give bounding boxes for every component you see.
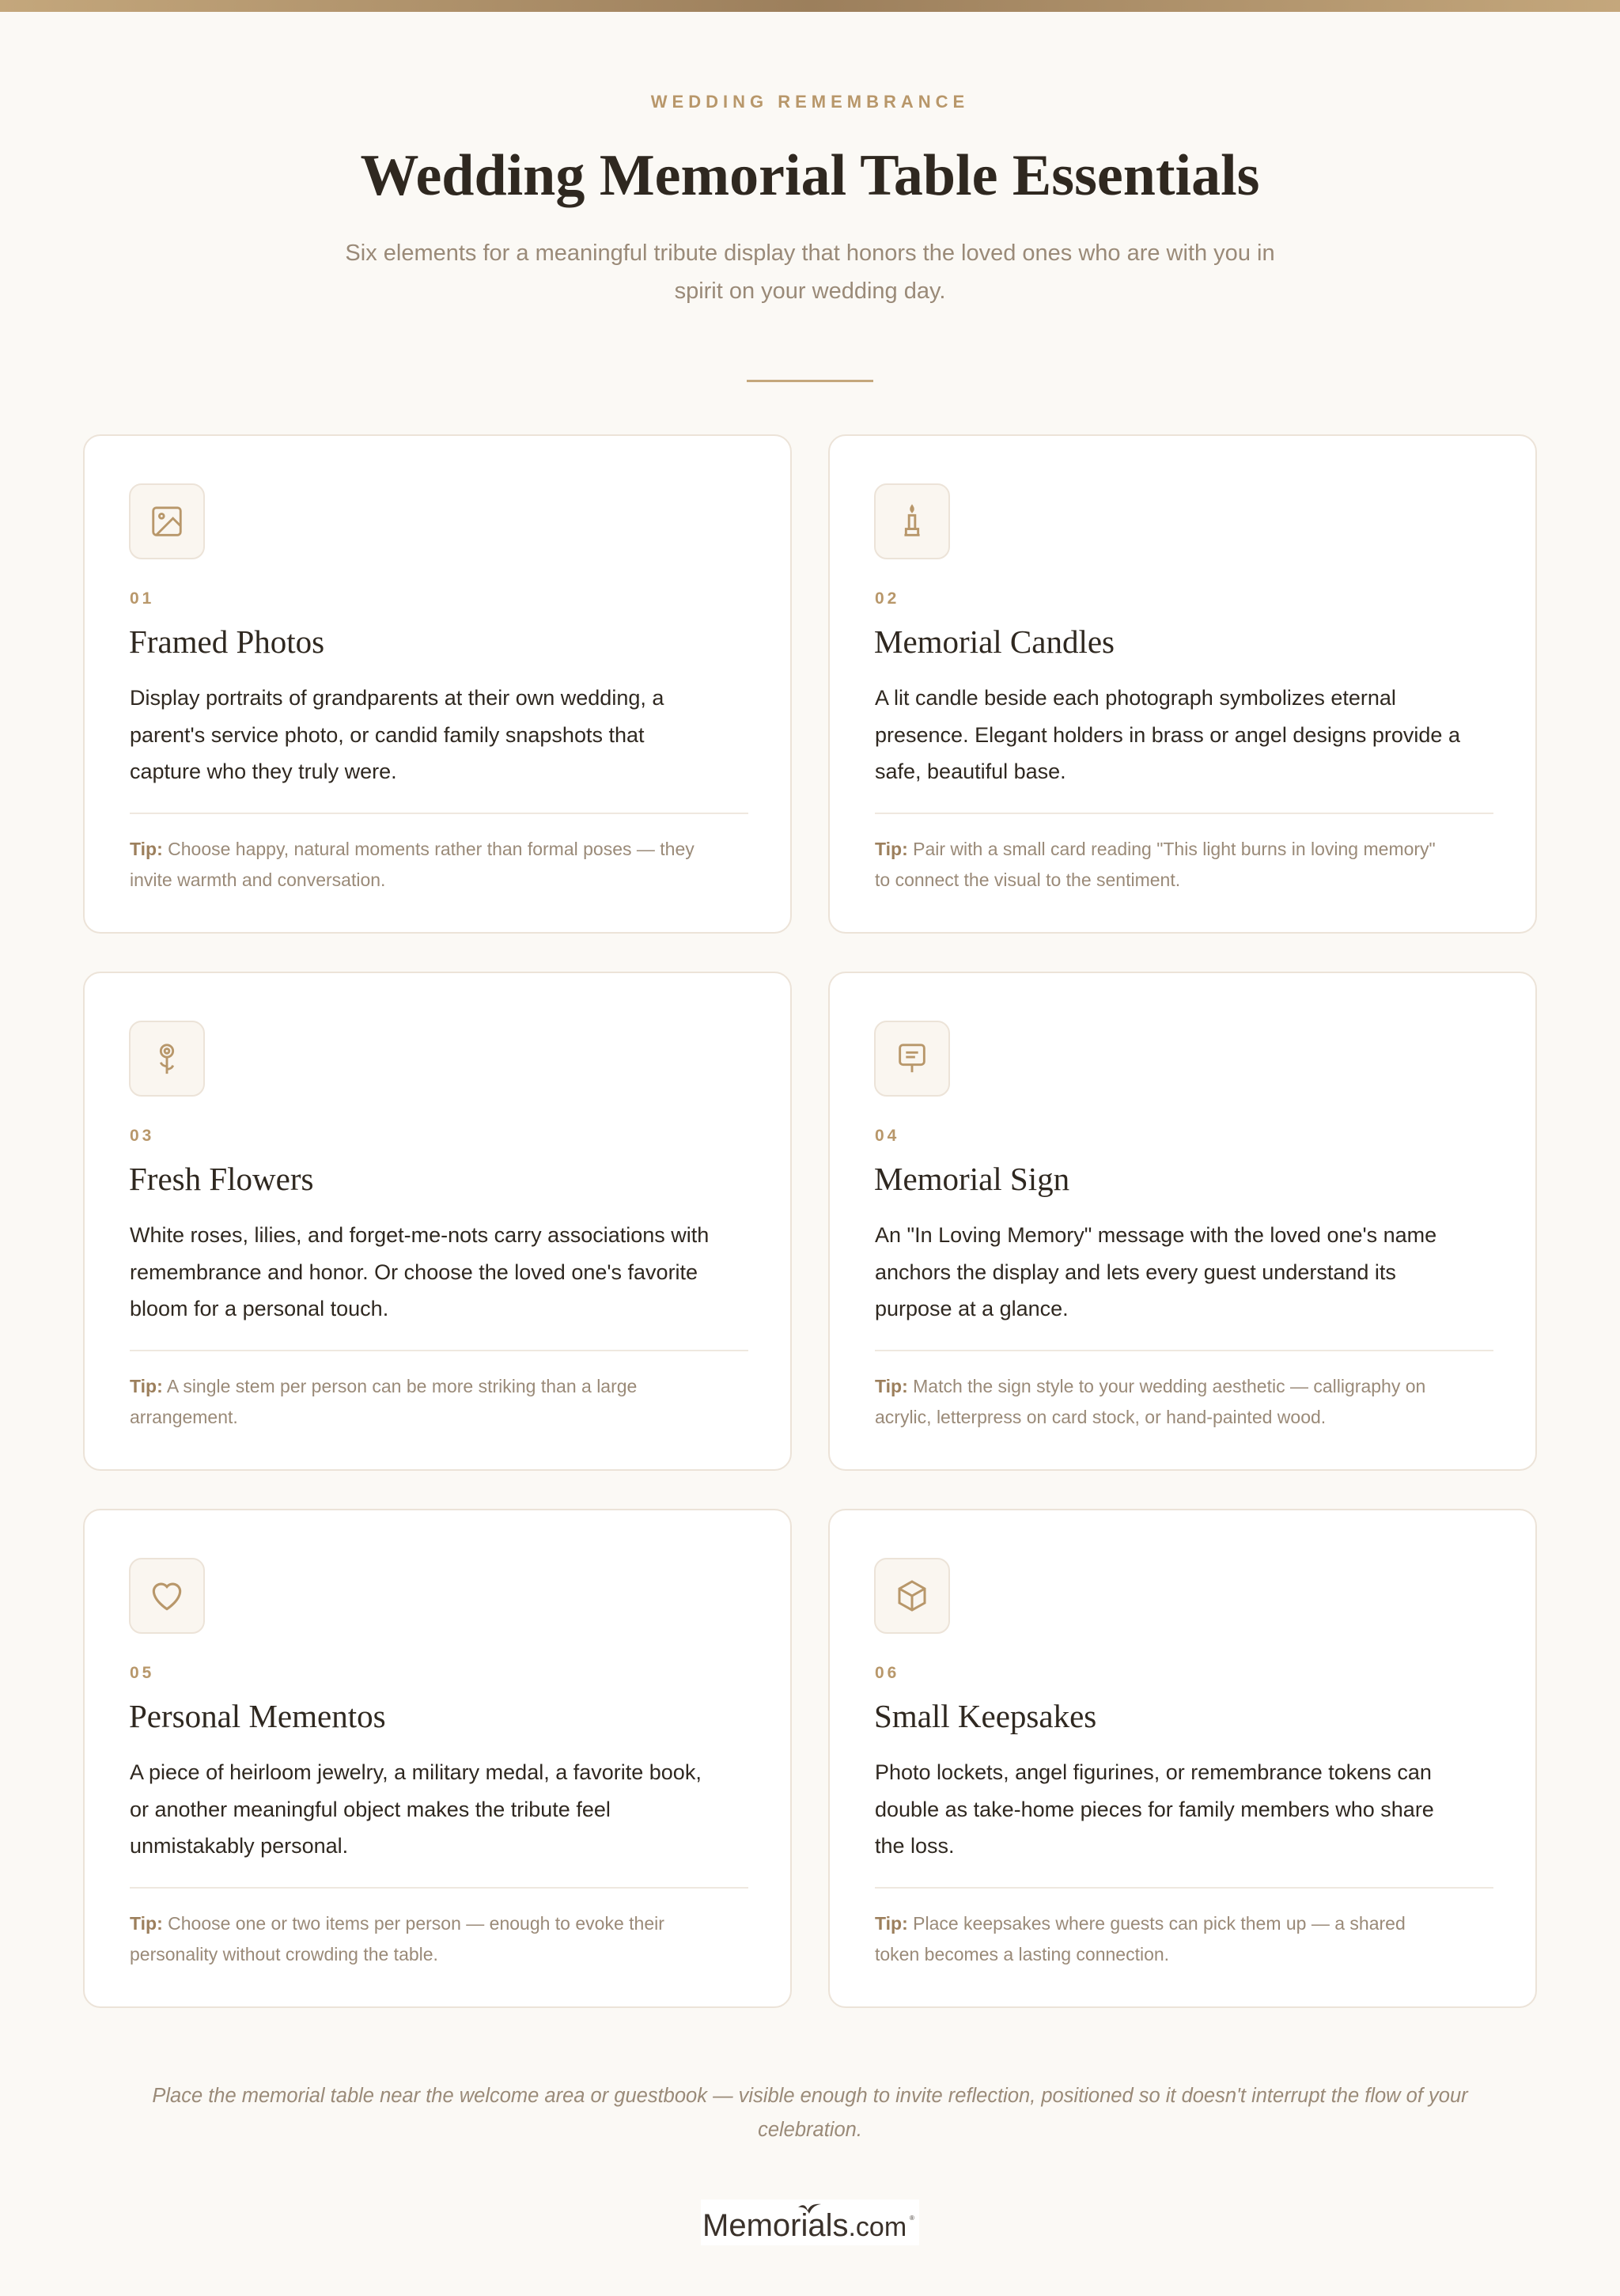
heading: Memorial Sign [874, 1161, 1069, 1197]
logo: Memorials.com [702, 2208, 907, 2243]
body: A piece of heirloom jewelry, a military medal, a favorite book, or another meaningful object makes the tribute feel unmistakably personal. [130, 1760, 702, 1858]
icon: flower [129, 1021, 205, 1097]
number: 05 [130, 1664, 154, 1682]
body: Photo lockets, angel figurines, or remembrance tokens can double as take-home pieces for family members who share the loss. [875, 1760, 1434, 1858]
icon: candle [874, 483, 950, 559]
card: fresh flowers [83, 972, 792, 1471]
number: 01 [130, 589, 154, 608]
icon: picture [129, 483, 205, 559]
card: framed photos [83, 434, 792, 934]
title: Wedding Memorial Table Essentials [361, 143, 1259, 208]
tip: Tip: Choose one or two items per person — enough to evoke their personality without crowding the table. [130, 1913, 664, 1964]
logo: ® [910, 2215, 914, 2222]
heading: Fresh Flowers [129, 1161, 313, 1197]
heading: Small Keepsakes [874, 1698, 1096, 1734]
heading: Personal Mementos [129, 1698, 386, 1734]
footer note: Place the memorial table near the welcome area or guestbook — visible enough to invite reflection, positioned so it doesn't interrupt the flow of your celebration. [152, 2085, 1468, 2141]
body: White roses, lilies, and forget-me-nots carry associations with remembrance and honor. Or choose the loved one's favorite bloom for a personal touch. [130, 1223, 709, 1320]
heading: Memorial Candles [874, 623, 1115, 660]
heading: Framed Photos [129, 623, 324, 660]
tip: Tip: Place keepsakes where guests can pick them up — a shared token becomes a lasting connection. [875, 1913, 1406, 1964]
icon: box [874, 1558, 950, 1634]
tip: Tip: A single stem per person can be more striking than a large arrangement. [130, 1376, 637, 1427]
body: Display portraits of grandparents at their own wedding, a parent's service photo, or candid family snapshots that capture who they truly were. [130, 686, 664, 783]
card: small keepsakes [828, 1509, 1537, 2008]
icon: heart [129, 1558, 205, 1634]
subtitle: Six elements for a meaningful tribute display that honors the loved ones who are with you in spirit on your wedding day. [345, 241, 1275, 304]
number: 06 [875, 1664, 899, 1682]
body: An "In Loving Memory" message with the loved one's name anchors the display and lets every guest understand its purpose at a glance. [875, 1223, 1436, 1320]
card: personal mementos [83, 1509, 792, 2008]
body: A lit candle beside each photograph symbolizes eternal presence. Elegant holders in brass or angel designs provide a safe, beautiful base. [875, 686, 1460, 783]
icon: sign [874, 1021, 950, 1097]
number: 04 [875, 1127, 899, 1145]
number: 02 [875, 589, 899, 608]
card: memorial candles [828, 434, 1537, 934]
card: memorial sign [828, 972, 1537, 1471]
tip: Tip: Match the sign style to your wedding aesthetic — calligraphy on acrylic, letterpress on card stock, or hand-painted wood. [875, 1376, 1425, 1427]
number: 03 [130, 1127, 154, 1145]
tip: Tip: Pair with a small card reading "This light burns in loving memory" to connect the visual to the sentiment. [875, 839, 1436, 890]
eyebrow: WEDDING REMEMBRANCE [651, 92, 969, 112]
tip: Tip: Choose happy, natural moments rather than formal poses — they invite warmth and conversation. [130, 839, 695, 890]
